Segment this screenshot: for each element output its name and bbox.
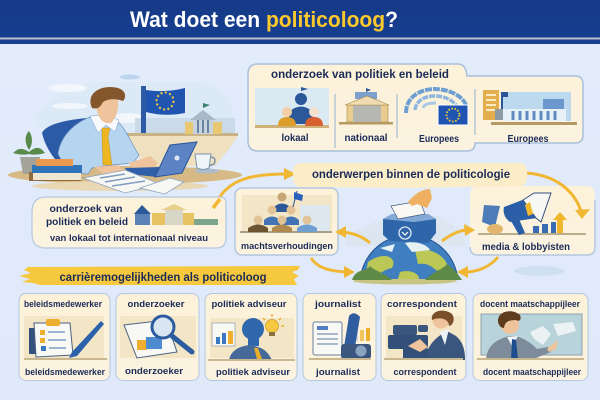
text: onderzoek van politiek en beleid: onderzoek van (50, 204, 122, 215)
card: beleidsmedewerker: beleidsmedewerker (24, 299, 102, 309)
card: docent maatschappijleer: docent maatschappijleer (480, 299, 580, 310)
panel: heading onderwerpen (293, 163, 527, 188)
card: onderzoeker: onderzoeker (128, 299, 185, 310)
panel: onderzoek van politiek en beleid (248, 64, 583, 151)
label: media & lobbyisten (482, 241, 570, 253)
arrowhead: machtsverhoudingen (335, 226, 346, 238)
text: onderzoek van politiek en beleid: politiek en beleid (46, 217, 128, 228)
papers (83, 170, 160, 193)
illustration: politicoloog at desk (8, 74, 242, 194)
card: onderzoeker: onderzoeker (125, 366, 183, 377)
panel: media en lobbyisten (470, 186, 595, 255)
cup (195, 168, 219, 174)
icon: vergrootglas en document (124, 316, 192, 358)
card: journalist: journalist (315, 367, 361, 378)
icon: klembord en pen (29, 319, 104, 358)
label: lokaal (282, 133, 309, 144)
item: Europees gebouw (483, 90, 577, 145)
label: Europees (508, 134, 549, 145)
label: Europees (419, 134, 459, 145)
arrowhead: media (575, 209, 590, 219)
card: correspondent: correspondent (394, 367, 457, 378)
arrowhead: onderwerpen (284, 168, 296, 180)
heading: carrièremogelijkheden: carrièremogelijkheden als politicoloog (60, 272, 266, 284)
arrow tail: tekstblok (213, 199, 220, 208)
icon: wereldkaart (481, 314, 582, 355)
card: politiek adviseur: politiek adviseur (216, 367, 290, 378)
arrowhead: globe links (344, 266, 355, 278)
arrow: onderwerpen naar media (526, 173, 582, 214)
panel: machtsverhoudingen (235, 188, 338, 255)
chair (42, 118, 86, 165)
icon: man met camera (388, 311, 465, 360)
card: beleidsmedewerker: beleidsmedewerker (25, 367, 105, 377)
icon: megafoon (482, 193, 567, 235)
plant (13, 131, 45, 155)
icon: stembiljet (391, 201, 425, 219)
arrowhead: media rechts (464, 224, 475, 236)
arrow: media naar globe (468, 257, 498, 272)
card: correspondent: correspondent (387, 299, 458, 310)
icon: hand (408, 189, 432, 208)
card: beleidsmedewerker (19, 294, 110, 380)
flag and building (141, 86, 146, 133)
card: onderzoeker (116, 294, 199, 380)
text: onderzoek van politiek en beleid (46, 204, 128, 228)
laptop (125, 167, 160, 177)
label: nationaal (344, 133, 388, 144)
card: politiek adviseur (205, 294, 297, 380)
illustration: globe with ballot box (345, 189, 466, 284)
arrow: machtsverhoudingen naar globe (311, 258, 345, 272)
icon: stembus (383, 214, 436, 243)
card: journalist: journalist (314, 299, 362, 310)
icon: docent (486, 311, 558, 360)
arrowhead: globe rechts (457, 266, 468, 278)
card: docent maatschappijleer: docent maatschappijleer (483, 367, 581, 378)
decorative cloud (514, 266, 564, 276)
icon: groep mensen (248, 191, 317, 232)
arrow: globe naar media (442, 230, 466, 241)
item: nationaal (339, 88, 393, 144)
icon: grafiek, adviseur en lamp (212, 314, 284, 360)
arrow: links naar onderwerpen (218, 174, 287, 200)
header banner (0, 0, 600, 44)
card: docent maatschappijleer (473, 294, 588, 380)
item: lokaal (255, 87, 329, 144)
books (29, 172, 81, 181)
card: politiek adviseur: politiek adviseur (212, 299, 287, 310)
title: Wat doet een politicoloog? (130, 7, 398, 32)
item: Europees parlement (406, 89, 468, 145)
text: van lokaal tot internationaal niveau: van lokaal tot internationaal niveau (50, 233, 208, 243)
label: machtsverhoudingen (241, 241, 333, 252)
heading: carrièremogelijkheden (19, 266, 300, 285)
arrow: globe naar machtsverhoudingen (343, 232, 370, 243)
panel: heading onderwerpen: onderwerpen binnen de politicologie (312, 167, 510, 181)
card: journalist (303, 294, 376, 380)
heading: onderzoek van politiek en beleid (271, 69, 449, 81)
icon: gebouwen (134, 204, 218, 225)
panel: onderzoek tekstblok (32, 197, 226, 248)
icon: document en microfoon (313, 313, 371, 359)
card: correspondent (381, 294, 466, 380)
man (58, 117, 139, 174)
